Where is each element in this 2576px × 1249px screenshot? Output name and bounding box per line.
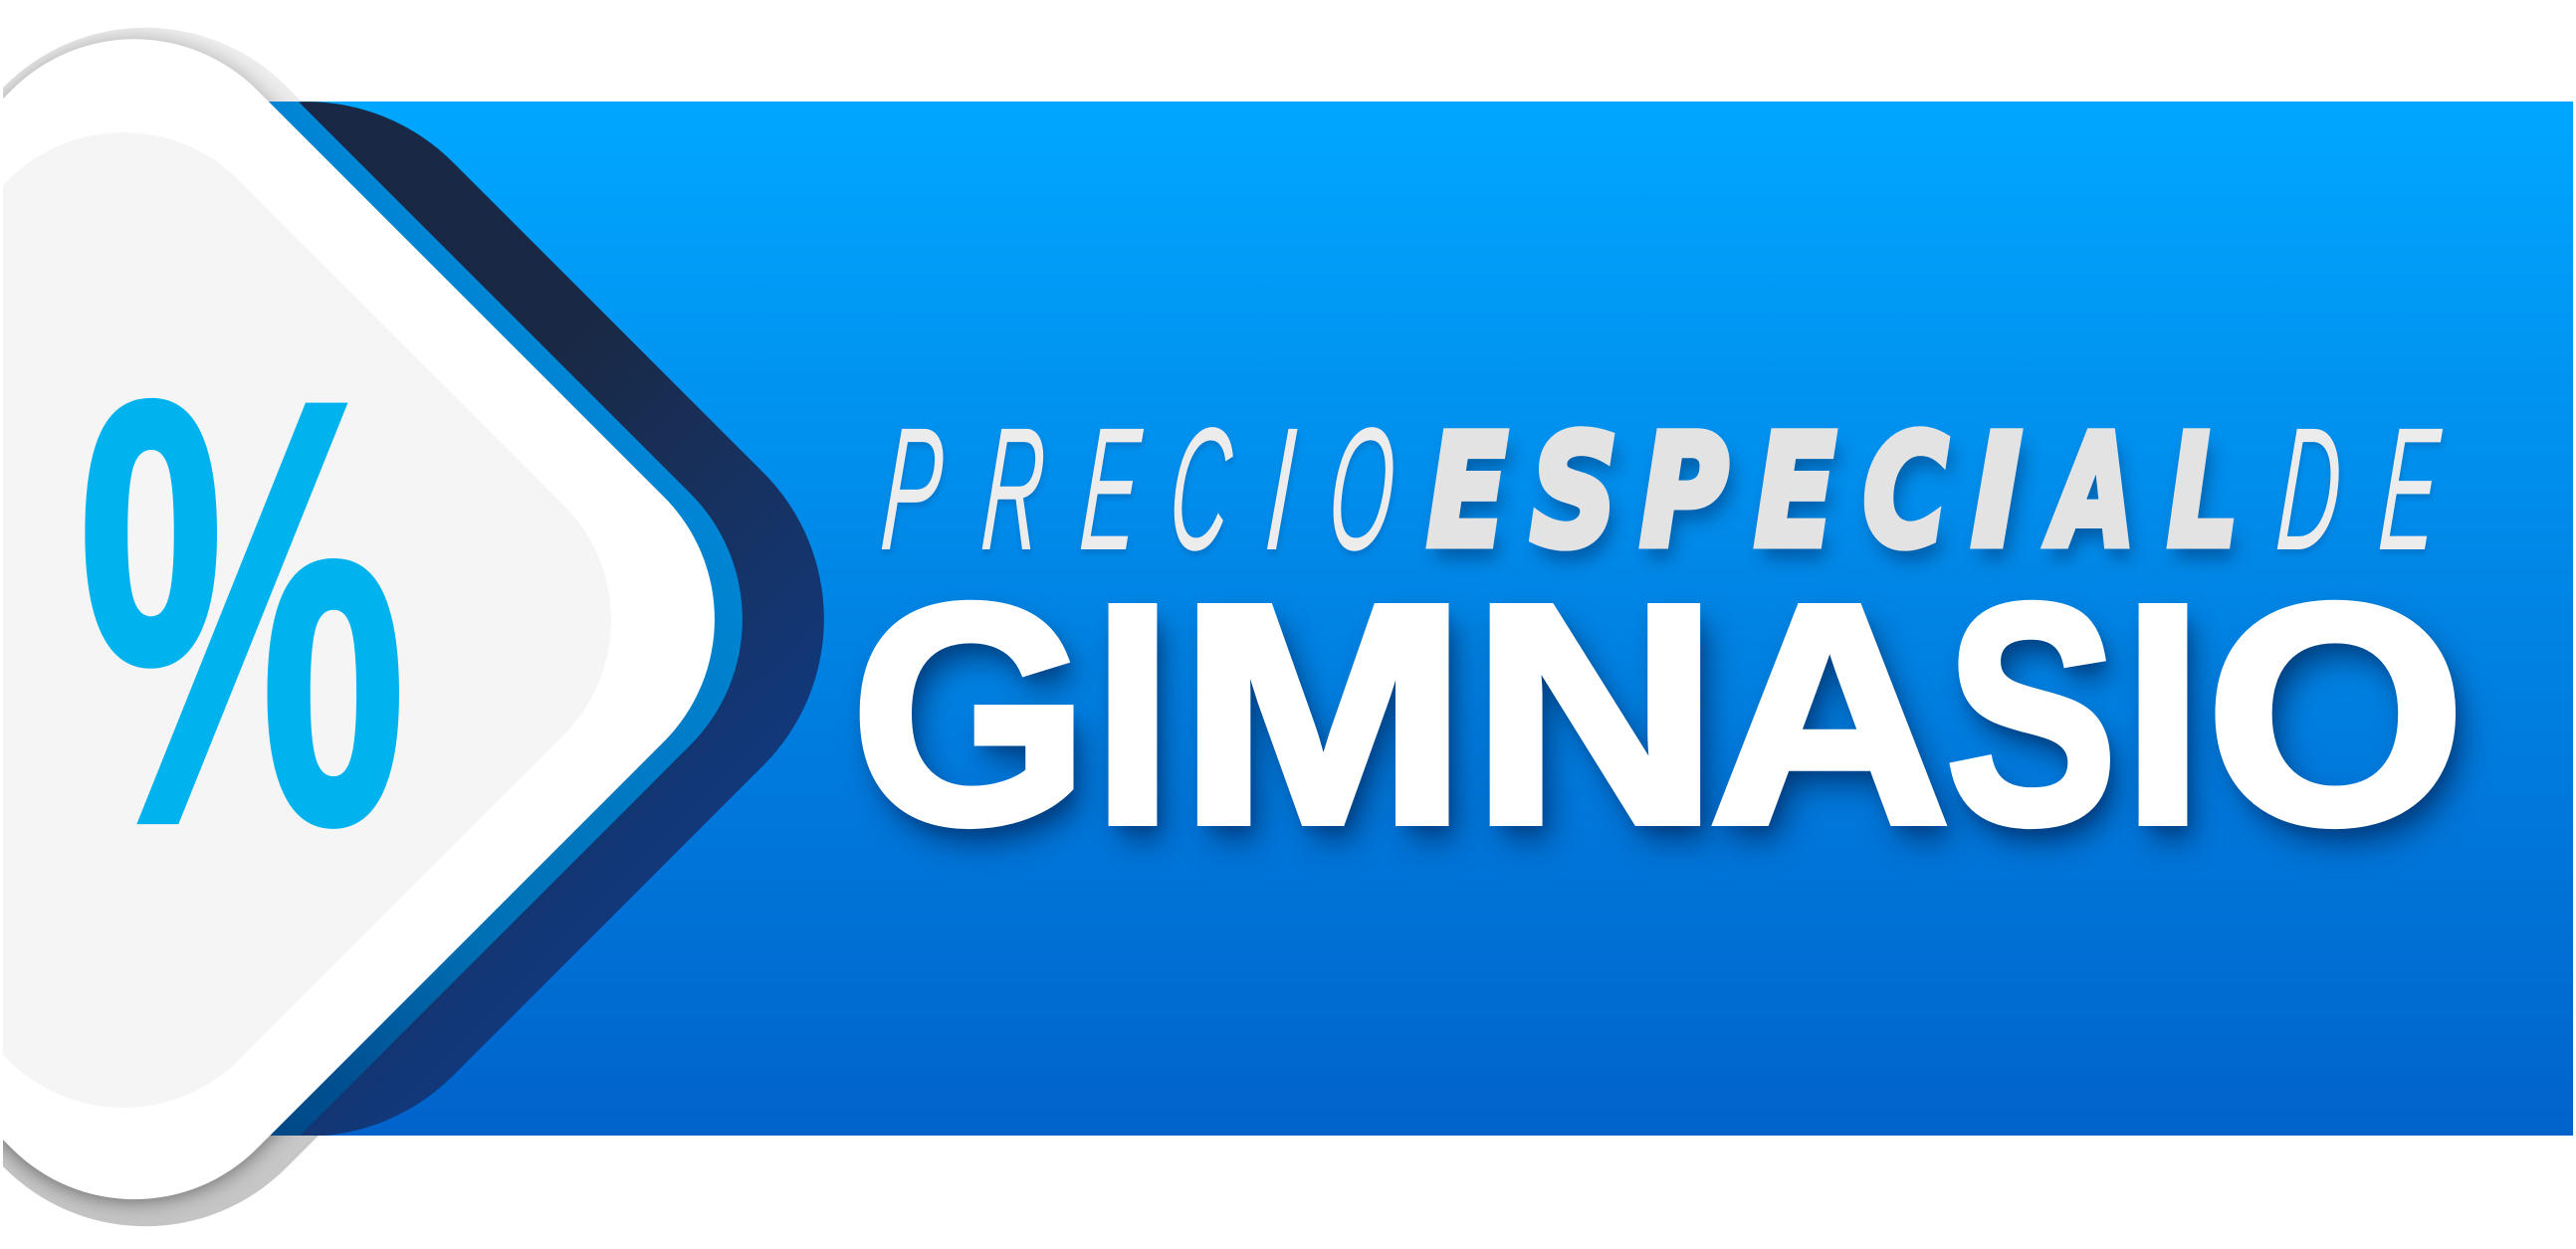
- subtitle: precio especial de: R: [976, 392, 1050, 587]
- title: gimnasio: A: [1709, 539, 1950, 889]
- percent symbol: %: [78, 276, 407, 949]
- subtitle: precio especial de: I: [1972, 403, 2022, 581]
- subtitle: precio especial de: E: [1755, 403, 1835, 581]
- subtitle: precio especial de: C: [1863, 403, 1948, 581]
- subtitle: precio especial de: L: [2168, 403, 2238, 581]
- title: gimnasio: I: [2123, 539, 2203, 889]
- title: gimnasio: G: [851, 539, 1089, 889]
- title: gimnasio: N: [1471, 539, 1719, 889]
- title: gimnasio: M: [1179, 539, 1467, 889]
- subtitle: precio especial de: A: [2052, 403, 2135, 581]
- subtitle: precio especial de: E: [1427, 403, 1507, 581]
- blue banner panel: [249, 102, 2573, 1136]
- title: gimnasio: O: [2206, 539, 2466, 889]
- subtitle: precio especial de: P: [876, 392, 949, 587]
- subtitle: precio especial de: I: [1260, 392, 1301, 587]
- drop shadow behind white tag: [3, 28, 319, 1226]
- subtitle: precio especial de: S: [1531, 403, 1617, 581]
- subtitle: precio especial de: E: [1075, 392, 1146, 587]
- subtitle: precio especial de: O: [1323, 392, 1400, 587]
- white tag: [3, 39, 715, 1200]
- subtitle: precio especial de: D: [2271, 392, 2347, 587]
- subtitle: precio especial de: E: [2374, 392, 2445, 587]
- title: gimnasio: S: [1946, 539, 2117, 889]
- title: gimnasio: I: [1093, 539, 1173, 889]
- mid blue chevron layer: [269, 102, 743, 1136]
- subtitle: precio especial de: P: [1640, 403, 1728, 581]
- navy chevron layer: [299, 102, 824, 1136]
- subtitle: precio especial de: C: [1164, 392, 1237, 587]
- light grey inner tag: [3, 132, 611, 1108]
